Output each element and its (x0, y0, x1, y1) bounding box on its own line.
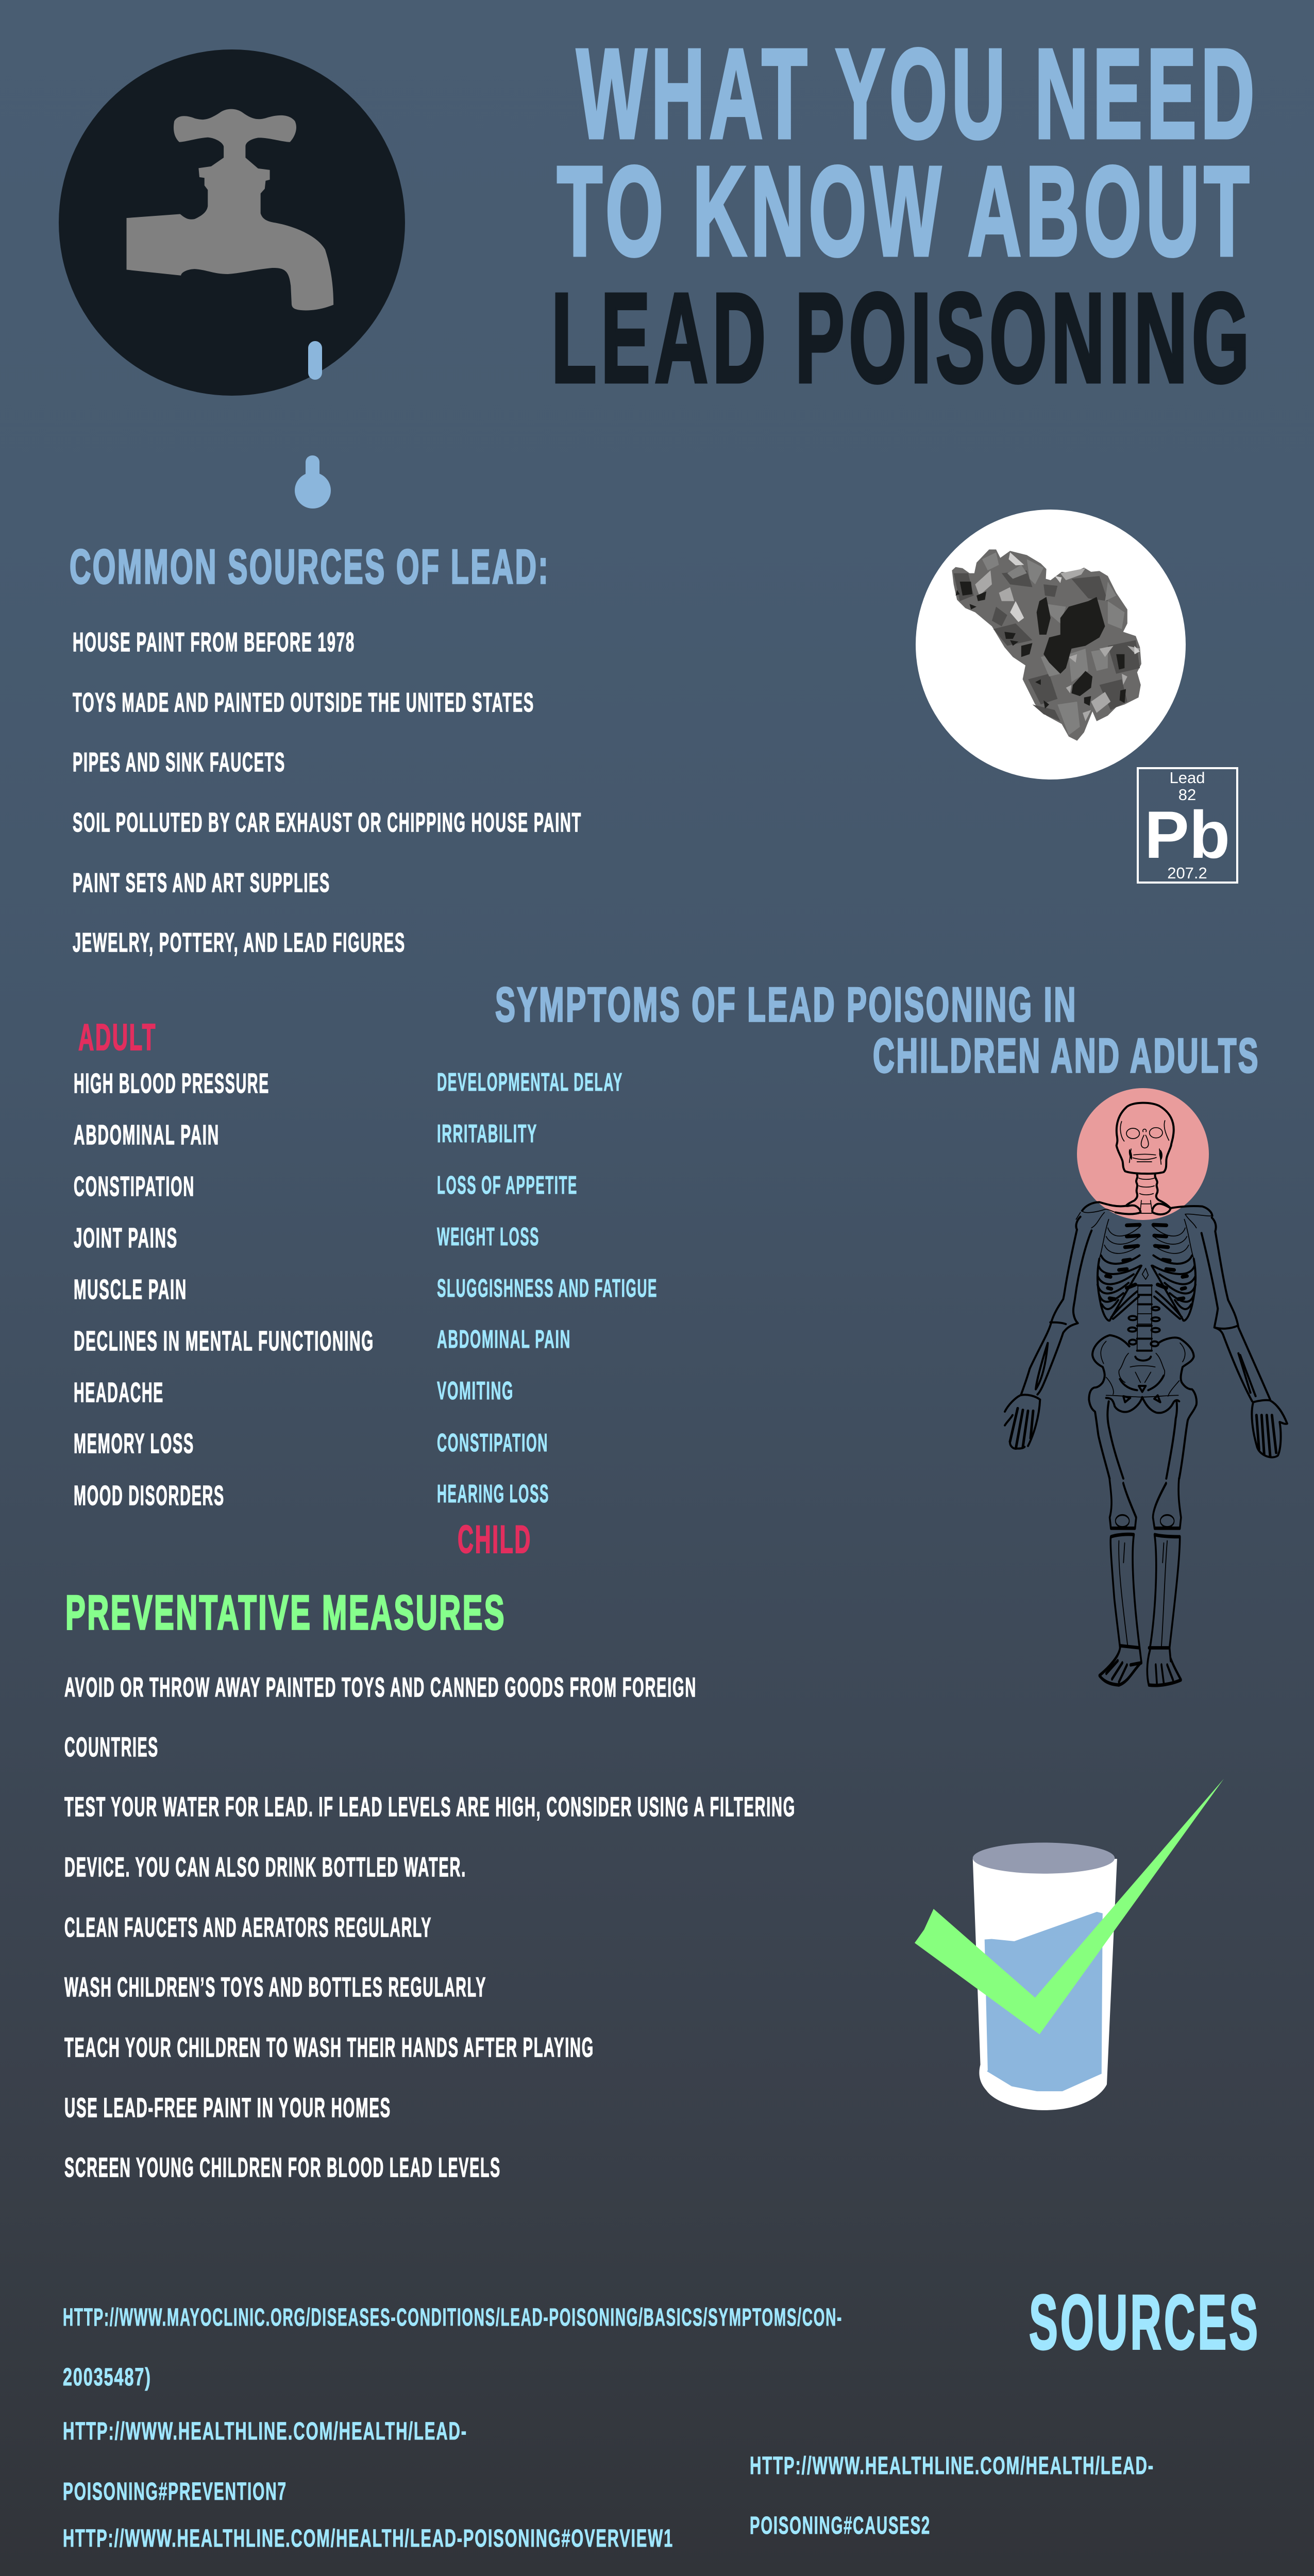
list: child symptoms: HEARING LOSS (437, 1480, 549, 1508)
list: preventative measures: COUNTRIES (64, 1732, 159, 1762)
panel: common sources of lead (70, 539, 582, 958)
list: child symptoms: DEVELOPMENTAL DELAY (437, 1069, 623, 1096)
lower legs and feet (1099, 1479, 1181, 1685)
right arm (1202, 1217, 1287, 1458)
icon: glass of water with check mark (915, 1779, 1224, 2110)
list: preventative measures: USE LEAD-FREE PAINT IN YOUR HOMES (64, 2093, 391, 2123)
list: adult symptoms: ABDOMINAL PAIN (74, 1120, 220, 1150)
list: preventative measures: CLEAN FAUCETS AND AERATORS REGULARLY (64, 1912, 432, 1943)
list: source urls left: HTTP://WWW.HEALTHLINE.COM/HEALTH/LEAD- (63, 2418, 467, 2445)
ribs right (1152, 1219, 1195, 1320)
heading: preventative measures: PREVENTATIVE MEASURES (65, 1585, 506, 1639)
element tile: Pb (1138, 768, 1237, 883)
list: lead sources (73, 628, 582, 958)
spine (1128, 1268, 1160, 1361)
list: adult symptoms: HEADACHE (74, 1377, 164, 1408)
list: adult symptoms: DECLINES IN MENTAL FUNCTIONING (74, 1326, 374, 1357)
list: lead sources: TOYS MADE AND PAINTED OUTSIDE THE UNITED STATES (73, 688, 534, 718)
list: adult symptoms (74, 1068, 374, 1511)
list: child symptoms (437, 1069, 658, 1508)
list: child symptoms: VOMITING (437, 1377, 514, 1405)
element tile: Pb: Lead (1170, 769, 1205, 787)
list: adult symptoms: MEMORY LOSS (74, 1428, 194, 1459)
list: adult symptoms: CONSTIPATION (74, 1171, 195, 1202)
icon: falling water drop (295, 455, 331, 509)
panel: sources (63, 2279, 1260, 2552)
heading: symptoms (495, 977, 1260, 1082)
label: adult: ADULT (78, 1017, 157, 1058)
left arm (1005, 1217, 1091, 1449)
title (551, 23, 1259, 409)
list: source urls left: HTTP://WWW.HEALTHLINE.COM/HEALTH/LEAD-POISONING#OVERVIEW1 (63, 2525, 673, 2552)
list: adult symptoms: MOOD DISORDERS (74, 1480, 225, 1511)
list: lead sources: PIPES AND SINK FAUCETS (73, 748, 285, 777)
icon: skeleton with highlighted head (1005, 1088, 1287, 1685)
ribs left (1098, 1219, 1141, 1320)
list: child symptoms: WEIGHT LOSS (437, 1223, 540, 1251)
element tile: Pb: 82 (1178, 786, 1196, 804)
list: preventative measures: WASH CHILDREN’S TOYS AND BOTTLES REGULARLY (64, 1972, 486, 2003)
list: preventative measures (64, 1672, 796, 2183)
list: adult symptoms: JOINT PAINS (74, 1223, 178, 1253)
list: lead sources: SOIL POLLUTED BY CAR EXHAUST OR CHIPPING HOUSE PAINT (73, 808, 582, 838)
list: source urls left: 20035487) (63, 2364, 151, 2391)
panel: child symptoms (437, 1069, 658, 1562)
list: child symptoms: SLUGGISHNESS AND FATIGUE (437, 1275, 658, 1302)
element tile: Pb: 207.2 (1167, 864, 1207, 882)
element tile: Pb: Pb (1144, 797, 1230, 872)
list: lead sources: PAINT SETS AND ART SUPPLIES (73, 868, 330, 898)
list: preventative measures: AVOID OR THROW AWAY PAINTED TOYS AND CANNED GOODS FROM FOREIGN (64, 1672, 697, 1703)
list: source urls right: POISONING#CAUSES2 (750, 2512, 931, 2539)
list: source urls left: POISONING#PREVENTION7 (63, 2478, 287, 2505)
torso, arms, pelvis and thighs (1005, 1217, 1287, 1479)
icon: dripping faucet (59, 49, 405, 396)
list: child symptoms: CONSTIPATION (437, 1429, 548, 1457)
list: source urls left (63, 2304, 843, 2552)
list: preventative measures: SCREEN YOUNG CHILDREN FOR BLOOD LEAD LEVELS (64, 2153, 501, 2183)
icon: lead ore rock in white circle (916, 510, 1186, 779)
pelvis and thighs (1089, 1335, 1197, 1479)
list: lead sources: HOUSE PAINT FROM BEFORE 1978 (73, 628, 355, 657)
list: child symptoms: LOSS OF APPETITE (437, 1172, 578, 1199)
panel: adult symptoms (74, 1017, 374, 1511)
label: child: CHILD (458, 1518, 532, 1562)
list: adult symptoms: MUSCLE PAIN (74, 1274, 187, 1305)
heading: common sources: COMMON SOURCES OF LEAD: (70, 539, 550, 594)
skull and neck (1076, 1103, 1212, 1228)
list: lead sources: JEWELRY, POTTERY, AND LEAD FIGURES (73, 928, 406, 958)
list: child symptoms: ABDOMINAL PAIN (437, 1326, 571, 1353)
list: preventative measures: DEVICE. YOU CAN ALSO DRINK BOTTLED WATER. (64, 1852, 466, 1883)
list: preventative measures: TEACH YOUR CHILDREN TO WASH THEIR HANDS AFTER PLAYING (64, 2032, 594, 2063)
list: source urls right (750, 2452, 1154, 2539)
list: child symptoms: IRRITABILITY (437, 1120, 537, 1148)
panel: preventative measures (64, 1585, 796, 2183)
list: adult symptoms: HIGH BLOOD PRESSURE (74, 1068, 269, 1099)
